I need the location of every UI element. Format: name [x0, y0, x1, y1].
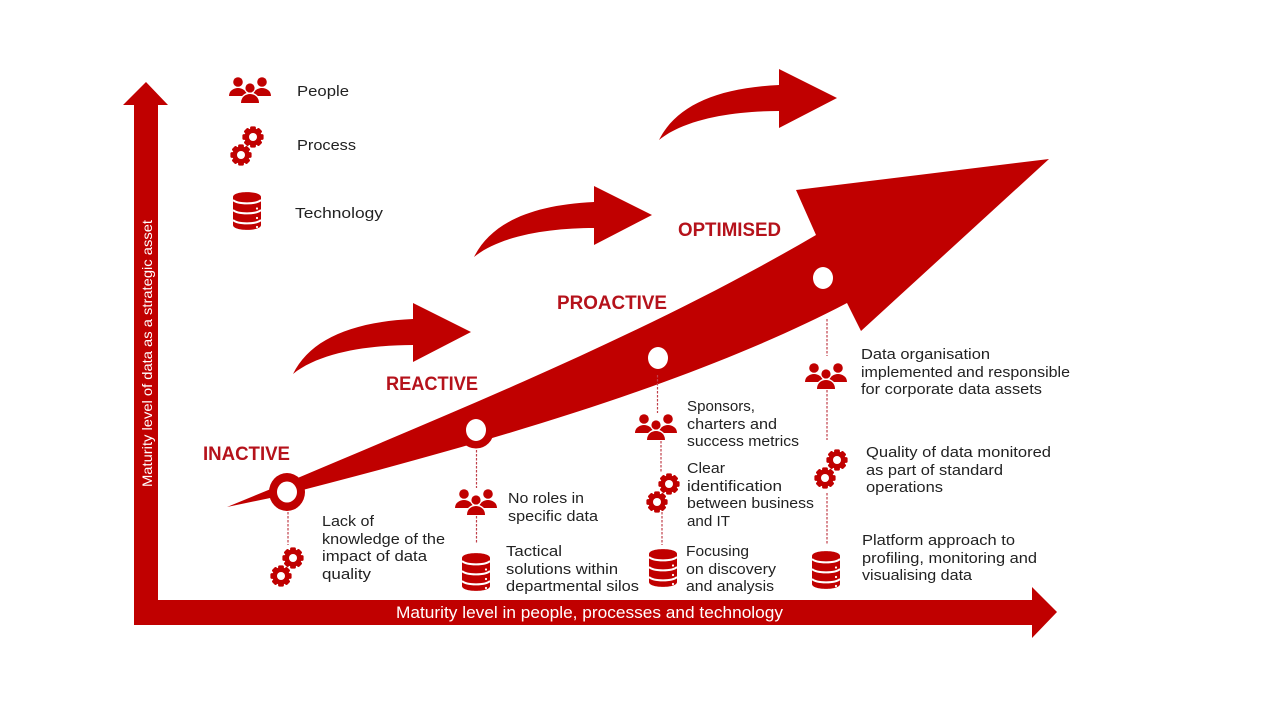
icon: people legend [229, 77, 271, 104]
legend label: technology: Technology [295, 205, 384, 222]
text: technology: profiling, monitoring and [862, 550, 1037, 567]
text: technology: and analysis [686, 578, 774, 595]
heading: proactive: PROACTIVE [557, 293, 667, 314]
curved arrow 3 [659, 69, 837, 140]
text: process: identification [687, 478, 782, 495]
text: technology: departmental silos [506, 578, 639, 595]
text: process: quality [322, 566, 372, 583]
icon: process [270, 547, 304, 587]
text: process: Lack of [322, 513, 375, 530]
milestone: reactive [458, 412, 494, 448]
heading: optimised: OPTIMISED [678, 220, 781, 241]
text: people: Data organisation [861, 346, 990, 363]
text: process: knowledge of the [322, 531, 445, 548]
icon: technology [812, 551, 840, 589]
text: process: as part of standard [866, 462, 1003, 479]
heading: reactive: REACTIVE [386, 374, 478, 395]
icon: technology [649, 549, 677, 587]
text: people: Sponsors, [687, 398, 755, 415]
text: people: charters and [687, 416, 777, 433]
milestone: proactive [648, 347, 668, 369]
milestone: inactive [269, 473, 305, 511]
vertical axis arrow [123, 82, 168, 625]
icon: people [805, 363, 847, 390]
horizontal axis arrow [134, 587, 1057, 638]
stage: reactive [455, 489, 639, 595]
curved arrow 1 [293, 303, 471, 374]
text: process: Quality of data monitored [866, 444, 1051, 461]
icon: process [814, 449, 848, 489]
text: technology: visualising data [862, 567, 973, 584]
stage: inactive [270, 513, 445, 587]
stage: proactive [635, 398, 814, 595]
text: people: No roles in [508, 490, 584, 507]
stage: optimised [805, 346, 1070, 589]
vertical axis label: Maturity level of data as a strategic asset [139, 220, 155, 487]
text: technology: on discovery [686, 561, 777, 578]
text: people: specific data [508, 508, 599, 525]
legend label: process: Process [297, 137, 356, 154]
text: process: operations [866, 479, 943, 496]
text: technology: Platform approach to [862, 532, 1015, 549]
text: process: between business [687, 495, 814, 512]
main rising arrow [227, 159, 1049, 511]
text: people: implemented and responsible [861, 364, 1070, 381]
text: technology: Focusing [686, 543, 749, 560]
heading: inactive: INACTIVE [203, 444, 290, 465]
legend [229, 77, 384, 230]
icon: process legend [230, 126, 264, 166]
icon: technology [462, 553, 490, 591]
icon: people [635, 414, 677, 441]
text: technology: solutions within [506, 561, 618, 578]
text: people: success metrics [687, 433, 799, 450]
text: process: and IT [687, 513, 730, 530]
text: process: Clear [687, 460, 725, 477]
legend label: people: People [297, 83, 349, 100]
text: technology: Tactical [506, 543, 562, 560]
text: process: impact of data [322, 548, 428, 565]
curved arrow 2 [474, 186, 652, 257]
icon: technology legend [233, 192, 261, 230]
text: people: for corporate data assets [861, 381, 1042, 398]
milestone: optimised [813, 267, 833, 289]
icon: people [455, 489, 497, 516]
horizontal axis label: Maturity level in people, processes and technology [396, 603, 783, 622]
icon: process [646, 473, 680, 513]
